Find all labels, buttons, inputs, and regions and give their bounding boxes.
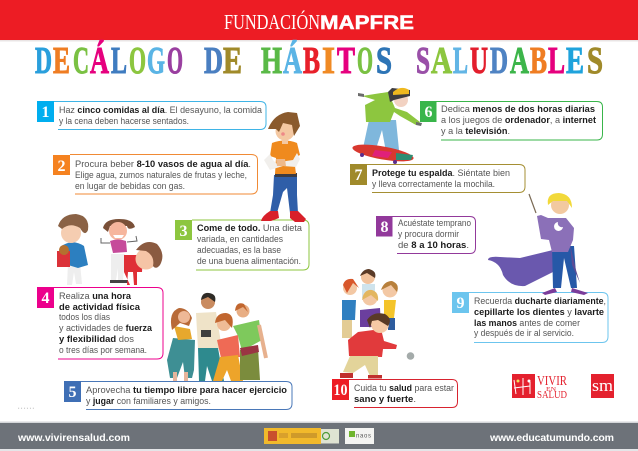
title: D [35, 40, 52, 82]
illustration: skateboarder [351, 88, 422, 165]
title: B [530, 40, 547, 82]
title: Á [90, 40, 109, 82]
panel: habit 8 [376, 216, 476, 254]
panel: habit 3: variada, en cantidades [197, 234, 283, 245]
panel: habit 4: o tres días por semana. [59, 345, 147, 356]
title: C [73, 40, 89, 82]
panel: habit 9 [452, 292, 608, 342]
panel: habit 4: Realiza una hora [59, 291, 132, 302]
title: E [53, 40, 70, 82]
panel: habit 3: de una buena alimentación. [197, 256, 301, 267]
panel: habit 6: a los juegos de ordenador, a internet [441, 115, 597, 126]
title: A [431, 40, 452, 82]
logos: sponsor strip [264, 428, 374, 444]
title: G [147, 40, 165, 82]
panel: habit 2 [53, 154, 258, 194]
title: O [167, 40, 183, 82]
panel: habit 4: de actividad física [59, 302, 141, 313]
panel: habit 10: Cuida tu salud para estar [354, 383, 455, 394]
panel: habit 7: Protege tu espalda. Siéntate bien [372, 168, 510, 179]
illustration: blonde kid with cape [488, 193, 588, 295]
header band: FUNDACIÓN [224, 10, 320, 34]
title: L [453, 40, 468, 82]
title: I [322, 40, 335, 82]
panel: habit 4: 4 [42, 290, 50, 307]
panel: habit 4: todos los días [59, 312, 110, 323]
panel: habit 5: Aprovecha tu tiempo libre para hacer ejercicio [86, 385, 287, 396]
title: U [470, 40, 488, 82]
panel: habit 7 [350, 164, 525, 192]
title: A [510, 40, 529, 82]
title: D [490, 40, 508, 82]
title: D [204, 40, 223, 82]
panel: habit 5: y jugar con familiares y amigos. [86, 396, 211, 407]
panel: habit 8: 8 [380, 219, 388, 236]
title: S [587, 40, 603, 82]
panel: habit 5 [64, 381, 292, 410]
panel: habit 7: y lleva correctamente la mochila. [372, 179, 495, 190]
panel: habit 2: 2 [58, 158, 66, 175]
title: S [416, 40, 430, 82]
title: L [548, 40, 565, 82]
panel: habit 10 [332, 379, 458, 408]
title: H [261, 40, 282, 82]
panel: habit 7: 7 [354, 167, 362, 184]
panel: habit 6: Dedica menos de dos horas diarias [441, 104, 595, 115]
panel: habit 6: 6 [424, 104, 432, 121]
panel: habit 8: y procura dormir [398, 229, 460, 240]
footer band: www.vivirensalud.com [17, 432, 130, 444]
title: E [566, 40, 584, 82]
panel: habit 1: y la cena deben hacerse sentados. [59, 116, 189, 127]
title: O [129, 40, 146, 82]
panel: habit 3: 3 [180, 223, 188, 240]
logos: sponsor strip: naos [356, 434, 371, 440]
panel: habit 4: y flexibilidad dos [59, 334, 134, 345]
header band: MAPFRE [320, 12, 414, 34]
title: T [337, 40, 355, 82]
small print: * * * * * * [18, 407, 35, 411]
illustration: boy in orange shirt [261, 112, 306, 222]
logo: sm [591, 374, 614, 398]
panel: habit 4 [37, 287, 163, 359]
panel: habit 4: y actividades de fuerza [59, 323, 153, 334]
panel: habit 2: en lugar de bebidas con gas. [75, 181, 185, 192]
panel: habit 1 [37, 101, 266, 130]
header band [0, 0, 638, 42]
title: O [357, 40, 373, 82]
title: L [111, 40, 127, 82]
panel: habit 3: Come de todo. Una dieta [197, 223, 303, 234]
logo: Vivir en Salud: SALUD [537, 389, 567, 401]
panel: habit 5: 5 [68, 384, 76, 401]
panel: habit 6 [420, 101, 602, 140]
footer band [0, 422, 638, 451]
panel: habit 10: sano y fuerte. [354, 394, 416, 405]
title: Á [283, 40, 302, 82]
logo: Vivir en Salud: EN [546, 387, 557, 393]
panel: habit 3: adecuadas, es la base [197, 245, 281, 256]
illustration: children group with ball [340, 269, 414, 378]
panel: habit 8: Acuéstate temprano [398, 218, 471, 229]
logo: sm: sm [592, 376, 613, 395]
panel: habit 9: las manos antes de comer [474, 318, 581, 329]
logo: Vivir en Salud: VIVIR [537, 374, 568, 389]
panel: habit 8: de 8 a 10 horas. [398, 240, 469, 251]
title: S [376, 40, 392, 82]
panel: habit 9: cepillarte los dientes y lavarte [474, 307, 604, 318]
panel: habit 1: Haz cinco comidas al día. El desayuno, la comida [59, 105, 263, 116]
panel: habit 2: Elige agua, zumos naturales de frutas y leche, [75, 170, 247, 181]
panel: habit 10: 10 [334, 382, 348, 399]
title: B [303, 40, 320, 82]
illustration: group of teenagers [167, 293, 266, 381]
panel: habit 1: 1 [42, 104, 50, 121]
title [35, 40, 603, 82]
panel: habit 9: 9 [456, 295, 464, 312]
logo: Vivir en Salud [512, 374, 568, 401]
panel: habit 6: y a la televisión. [441, 126, 510, 137]
title: E [223, 40, 242, 82]
panel: habit 2: Procura beber 8-10 vasos de agua al día. [75, 159, 251, 170]
panel: habit 3 [175, 220, 309, 270]
footer band: www.educatumundo.com [489, 432, 614, 444]
panel: habit 9: y después de ir al servicio. [474, 328, 574, 339]
panel: habit 9: Recuerda ducharte diariamente, [474, 296, 606, 307]
illustration: kids eating and exercising [57, 214, 162, 285]
